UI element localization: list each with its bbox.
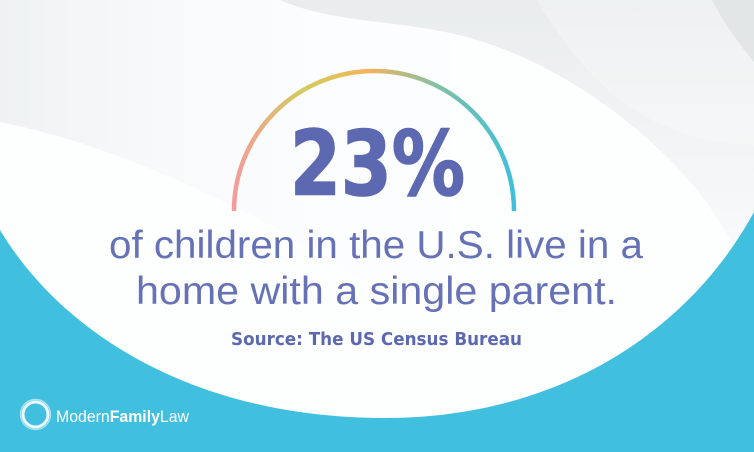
statistic: 23%: 23% bbox=[290, 112, 465, 216]
gradient arc bbox=[234, 71, 514, 211]
icon: logo ring bbox=[20, 400, 50, 430]
logo bbox=[20, 400, 189, 430]
statement text: home with a single parent. bbox=[136, 270, 617, 313]
statement text bbox=[109, 224, 643, 313]
source: Source: The US Census Bureau bbox=[231, 329, 522, 350]
blue wave footer bbox=[0, 212, 754, 452]
statement text: of children in the U.S. live in a bbox=[109, 224, 643, 267]
logo wordmark: ModernFamilyLaw bbox=[56, 408, 189, 426]
